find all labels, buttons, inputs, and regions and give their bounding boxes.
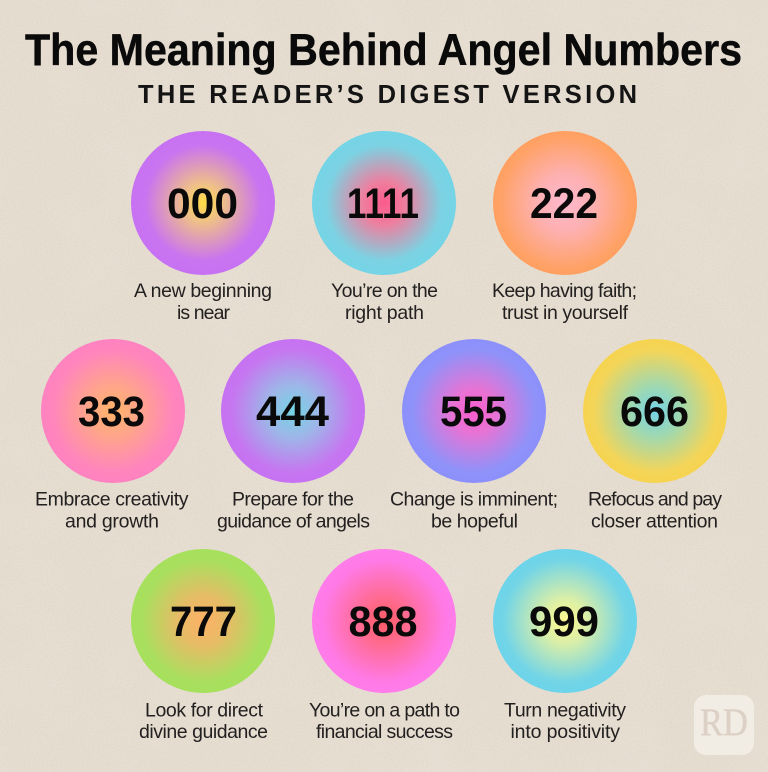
item: 888: 888 (348, 598, 418, 646)
item: 777 (131, 549, 275, 743)
item: 1111 (312, 131, 456, 324)
item: 777: Look for direct (145, 700, 264, 722)
item: 444: 444 (256, 388, 329, 436)
item: 444: Prepare for the (232, 488, 354, 510)
logo: RD badge: RD (700, 701, 748, 744)
item: 999: Turn negativity (504, 700, 626, 722)
item: 777: divine guidance (139, 721, 268, 743)
item: 1111: right path (345, 302, 424, 324)
item: 555 (390, 339, 558, 532)
item: 999: 999 (529, 598, 599, 646)
item: 333: 333 (78, 388, 145, 436)
item: 000: is near (177, 302, 230, 324)
item: 444 (217, 339, 370, 532)
item: 333: Embrace creativity (35, 488, 189, 510)
logo: RD badge (694, 695, 754, 755)
item: 000 (131, 131, 275, 324)
item: 666: closer attention (591, 510, 718, 532)
item: 222: trust in yourself (502, 302, 629, 324)
item: 555: Change is imminent; (390, 488, 558, 510)
item: 888 (309, 549, 460, 743)
item: 777: 777 (170, 598, 237, 646)
item: 444: guidance of angels (217, 510, 370, 532)
item: 222: Keep having faith; (492, 280, 637, 302)
item: 222: 222 (530, 180, 598, 228)
item: 1111: You’re on the (331, 280, 438, 302)
item: 888: financial success (316, 721, 453, 743)
item: 555: be hopeful (431, 510, 518, 532)
item: 666: Refocus and pay (588, 488, 722, 510)
item: 000: A new beginning (134, 280, 272, 302)
item: 888: You’re on a path to (309, 700, 460, 722)
item: 333 (35, 339, 189, 532)
item: 333: and growth (65, 510, 159, 532)
item: 666: 666 (620, 388, 689, 436)
item: 666 (583, 339, 727, 532)
item: 999: into positivity (510, 721, 620, 743)
item: 1111: 1111 (347, 180, 419, 228)
item: 999 (493, 549, 637, 743)
item: 555: 555 (440, 388, 507, 436)
subtitle: THE READER’S DIGEST VERSION (138, 81, 637, 109)
item: 000: 000 (167, 180, 238, 228)
item: 222 (492, 131, 637, 324)
